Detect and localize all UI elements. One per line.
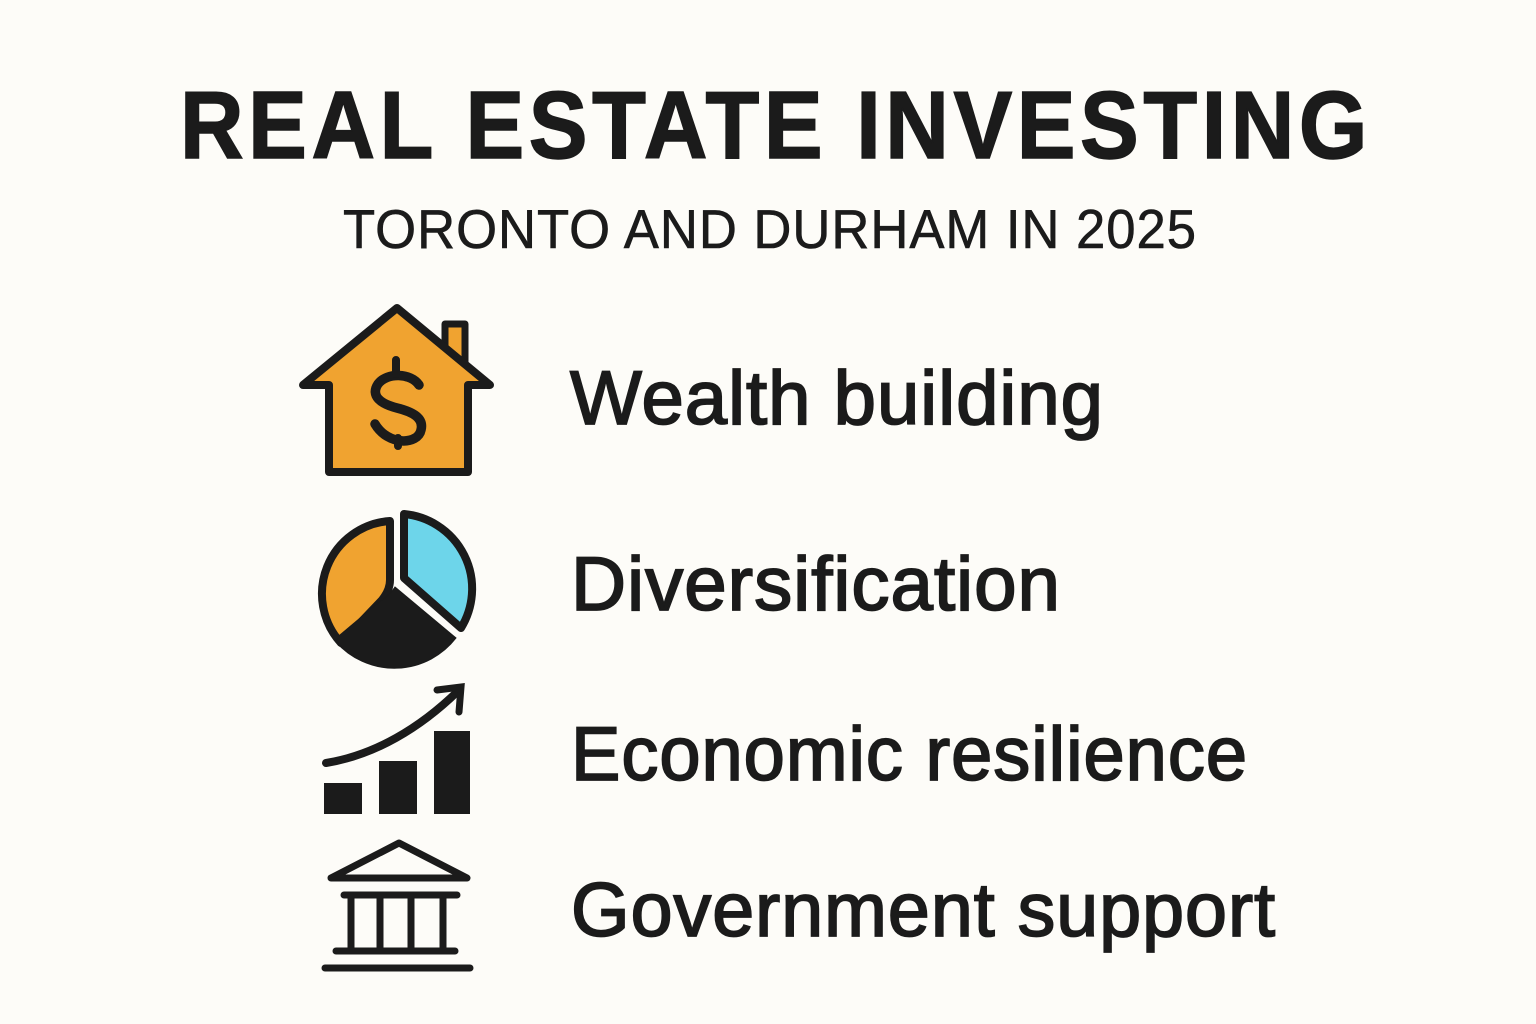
icon: government building — [325, 843, 470, 968]
icon: house with dollar sign — [303, 308, 490, 472]
icon: pie chart — [322, 514, 472, 668]
label: diversification: Diversification — [571, 542, 1061, 627]
subtitle: TORONTO AND DURHAM IN 2025 — [343, 198, 1197, 260]
label: economic resilience: Economic resilience — [571, 712, 1248, 797]
label: government support: Government support — [571, 868, 1276, 953]
orange slice — [322, 521, 390, 643]
title: REAL ESTATE INVESTING — [180, 72, 1372, 179]
black slice — [336, 587, 456, 668]
icon: growth bars with arrow — [324, 687, 470, 814]
label: wealth building: Wealth building — [570, 356, 1104, 441]
blue slice — [404, 514, 472, 628]
